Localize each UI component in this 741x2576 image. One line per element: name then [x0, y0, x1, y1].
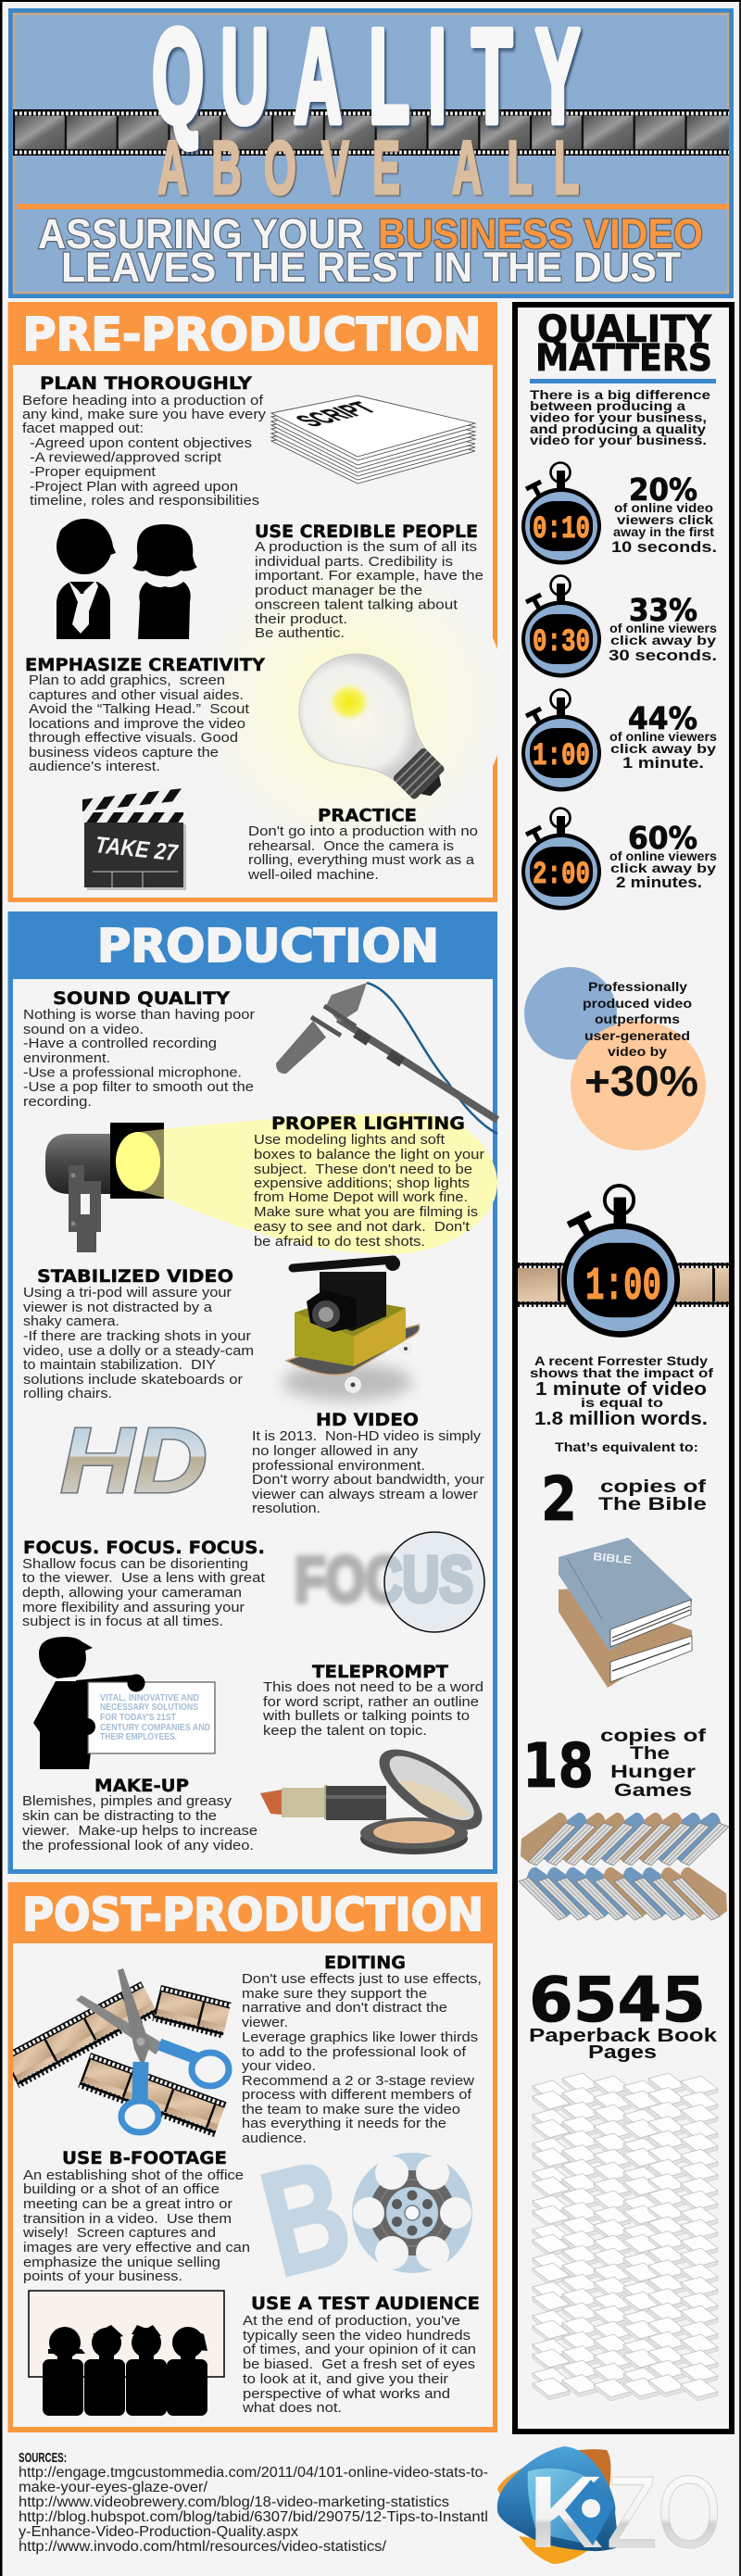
text: forrester study: [530, 1353, 713, 1454]
text: editing: has everything it needs for the: [242, 2116, 446, 2131]
text: use b-footage: [22, 2148, 250, 2284]
text: proper lighting: from Home Depot will work fine.: [254, 1189, 468, 1205]
text: hd video: resolution.: [252, 1501, 320, 1516]
stat: 18 copies of the hunger games: Hunger: [610, 1763, 697, 1782]
text: emphasize creativity: locations and improve the video: [29, 716, 245, 732]
icon: HD logo: HD: [60, 1409, 207, 1513]
icon: light bulb: [275, 630, 476, 831]
icon: pile of pages: [533, 2073, 718, 2401]
text: editing: process with different members of: [242, 2087, 472, 2103]
logo: kzo: K: [529, 2456, 603, 2570]
icon: presenter with cue card: NECESSARY SOLUTIONS: [100, 1703, 198, 1713]
heading: post-production: POST-PRODUCTION: [22, 1889, 484, 1941]
sources: [19, 2450, 488, 2555]
text: stabilized video: rolling chairs.: [23, 1386, 112, 1401]
text: sound quality: environment.: [23, 1050, 110, 1066]
text: use a test audience: typically seen the video hundreds: [243, 2328, 471, 2344]
text: editing: to add to the professional look of: [242, 2044, 467, 2060]
callout: +30% venn: video by: [608, 1044, 667, 1059]
text: stabilized video: -If there are tracking shots in your: [23, 1328, 251, 1344]
icon: stopwatch 1:00: 1:00: [533, 739, 590, 774]
text: use b-footage: meeting can be a great intro or: [23, 2196, 232, 2212]
stat: 2 copies of the bible: The Bible: [598, 1495, 707, 1514]
heading: pre-production: PRE-PRODUCTION: [22, 308, 482, 361]
text: editing: your video.: [242, 2058, 316, 2074]
text: use a test audience: to look at it, and give you their: [243, 2371, 448, 2387]
text: sound quality: SOUND QUALITY: [53, 988, 230, 1009]
callout: +30% venn: Professionally: [588, 979, 687, 994]
text: practice: well-oiled machine.: [247, 867, 379, 883]
text: emphasize creativity: [25, 655, 265, 774]
stat: 20%: [611, 471, 717, 556]
text: plan thoroughly: any kind, make sure you have every: [22, 407, 267, 422]
icon: blurred focus word with lens: FOCUS: [295, 1543, 473, 1615]
text: plan thoroughly: -Project Plan with agreed upon: [30, 479, 238, 495]
stat: 44%: [609, 700, 717, 772]
text: sound quality: Nothing is worse than having poor: [23, 1007, 255, 1023]
stat: 20%: 20%: [629, 471, 697, 508]
text: emphasize creativity: audience's interest.: [29, 759, 160, 774]
stat: 33%: 30 seconds.: [609, 647, 717, 664]
film strip band: [13, 109, 729, 156]
text: plan thoroughly: PLAN THOROUGHLY: [40, 373, 252, 394]
icon: presenter with cue card: CENTURY COMPANIES AND: [100, 1723, 210, 1733]
stat: 60%: of online viewers: [609, 848, 717, 863]
text: editing: EDITING: [324, 1953, 406, 1973]
text: hd video: HD VIDEO: [316, 1410, 419, 1430]
text: forrester study: A recent Forrester Study: [534, 1353, 708, 1368]
icon: stopwatch 0:30: 0:30: [533, 625, 590, 660]
icon: large stopwatch: [561, 1186, 680, 1338]
text: forrester study: That’s equivalent to:: [555, 1439, 698, 1454]
text: stabilized video: video, use a dolly or a steady-cam: [23, 1343, 254, 1359]
logo: kzo: [497, 2446, 722, 2570]
text: make-up: [22, 1776, 257, 1853]
text: plan thoroughly: -A reviewed/approved script: [30, 450, 222, 465]
text: proper lighting: PROPER LIGHTING: [271, 1113, 465, 1134]
text: hd video: professional environment.: [252, 1458, 425, 1474]
stat: 60%: [609, 820, 717, 891]
text: hd video: [252, 1410, 484, 1516]
text: use a test audience: what does not.: [242, 2400, 342, 2416]
icon: man silhouette: [57, 519, 116, 639]
icon: blurred focus word with lens: [295, 1532, 484, 1632]
text: practice: PRACTICE: [318, 806, 417, 826]
heading: quality matters: MATTERS: [535, 337, 712, 380]
icon: script pile: SCRIPT: [287, 398, 383, 430]
text: use credible people: individual parts. Credibility is: [255, 554, 453, 570]
text: use b-footage: An establishing shot of the office: [23, 2168, 244, 2183]
panel: pre-production: [7, 302, 507, 902]
callout: +30% venn: produced video: [583, 996, 692, 1011]
text: use credible people: important. For example, have the: [255, 568, 484, 584]
text: intro: There is a big difference: [530, 387, 710, 402]
icon: spotlight beam: [164, 1113, 497, 1254]
stat: 2 copies of the bible: [541, 1464, 707, 1535]
text: sound quality: sound on a video.: [23, 1022, 144, 1037]
icon: light glow: [195, 547, 507, 858]
heading: production: PRODUCTION: [97, 920, 439, 973]
text: emphasize creativity: through effective visuals. Good: [29, 730, 238, 746]
icon: audience silhouettes at screen: [29, 2291, 224, 2416]
stat: 18 copies of the hunger games: The: [630, 1744, 670, 1764]
text: editing: Recommend a 2 or 3-stage review: [242, 2073, 474, 2089]
text: proper lighting: Use modeling lights and soft: [254, 1132, 446, 1148]
callout: +30% venn: outperforms: [595, 1012, 680, 1026]
icon: lipstick and compact: [260, 1735, 495, 1854]
text: emphasize creativity: Plan to add graphics, screen: [29, 672, 225, 688]
text: hd video: Don't worry about bandwidth, your: [252, 1472, 484, 1488]
text: emphasize creativity: business videos capture the: [29, 745, 219, 760]
text: plan thoroughly: facet mapped out:: [22, 421, 144, 436]
film strip: sidebar: [518, 1263, 729, 1307]
panel: production: [7, 911, 497, 1874]
text: use credible people: onscreen talent talking about: [255, 597, 458, 613]
icon: presenter with cue card: [33, 1637, 215, 1769]
text: teleprompt: TELEPROMPT: [312, 1662, 448, 1682]
subtitle: BUSINESS VIDEO: [378, 210, 703, 258]
stat: 2 copies of the bible: copies of: [600, 1477, 707, 1497]
stat: 33%: [609, 592, 717, 664]
text: hd video: no longer allowed in any: [252, 1443, 419, 1459]
header banner: [8, 2, 734, 298]
text: use credible people: their product.: [255, 611, 347, 627]
icon: presenter with cue card: FOR TODAY'S 21ST: [100, 1713, 176, 1723]
text: sound quality: -Use a pop filter to smooth out the: [23, 1079, 254, 1095]
text: proper lighting: subject. These don't need to be: [254, 1162, 472, 1177]
text: hd video: It is 2013. Non-HD video is simply: [252, 1428, 482, 1444]
text: intro: and producing a quality: [530, 421, 706, 436]
text: proper lighting: expensive additions; shop lights: [254, 1175, 470, 1191]
text: use b-footage: points of your business.: [23, 2268, 182, 2284]
stat: 44%: 44%: [628, 700, 697, 736]
text: editing: viewer.: [242, 2015, 288, 2030]
text: use credible people: [255, 521, 484, 641]
stat: 18 copies of the hunger games: [522, 1727, 707, 1802]
text: use a test audience: At the end of production, you've: [243, 2313, 460, 2329]
icon: boom microphone: [276, 983, 497, 1134]
text: practice: rolling, everything must work as a: [248, 852, 475, 868]
icon: stopwatch 2:00: 2:00: [533, 858, 590, 893]
text: teleprompt: [262, 1662, 484, 1739]
stat: 2 copies of the bible: 2: [541, 1464, 577, 1535]
stat: 60%: 2 minutes.: [616, 873, 702, 891]
text: forrester study: is equal to: [581, 1395, 663, 1410]
icon: camera on skateboard: [283, 1256, 420, 1401]
text: use a test audience: be biased. Get a fresh set of eyes: [243, 2356, 475, 2372]
stat: 33%: click away by: [610, 633, 716, 647]
text: use a test audience: perspective of what works and: [243, 2386, 450, 2402]
text: emphasize creativity: Avoid the “Talking Head.” Scout: [29, 701, 250, 717]
text: use credible people: USE CREDIBLE PEOPLE: [255, 521, 478, 542]
text: use b-footage: wisely! Screen captures and: [22, 2225, 216, 2241]
text: proper lighting: easy to see and not dark. Don't: [254, 1219, 471, 1235]
text: plan thoroughly: [22, 373, 267, 509]
text: plan thoroughly: timeline, roles and responsibilities: [30, 493, 259, 509]
text: hd video: viewer can always stream a lower: [252, 1487, 478, 1502]
stat: 18 copies of the hunger games: copies of: [600, 1727, 707, 1746]
panel: post-production: [2, 1882, 497, 2432]
text: use a test audience: of times, and your opinion of it can: [243, 2342, 476, 2357]
stat: 6545 paperback book pages: [529, 1964, 718, 2063]
text: teleprompt: with bullets or talking points to: [262, 1708, 470, 1724]
text: intro: between producing a: [530, 398, 685, 413]
text: focus: to the viewer. Use a lens with great: [22, 1570, 266, 1586]
text: sound quality: [23, 988, 255, 1110]
stat: 60%: click away by: [610, 861, 716, 875]
sources: http://www.invodo.com/html/resources/video-statistics/: [19, 2539, 387, 2555]
stat: 33%: of online viewers: [609, 621, 717, 635]
icon: bibles: BIBLE: [593, 1550, 633, 1566]
text: teleprompt: for word script, rather an outline: [263, 1694, 479, 1710]
text: make-up: skin can be distracting to the: [22, 1808, 217, 1824]
text: stabilized video: [23, 1266, 254, 1401]
callout: +30% venn: user-generated: [584, 1028, 690, 1043]
heading: quality matters: QUALITY: [537, 308, 712, 351]
text: plan thoroughly: -Proper equipment: [30, 464, 157, 480]
text: make-up: Blemishes, pimples and greasy: [22, 1793, 232, 1809]
text: stabilized video: solutions include skateboards or: [23, 1372, 243, 1388]
text: emphasize creativity: captures and other visual aides.: [29, 687, 244, 703]
title: above all: ABOVE ALL: [157, 126, 579, 211]
text: stabilized video: to maintain stabilization. DIY: [23, 1357, 216, 1373]
stat: 33%: 33%: [629, 592, 697, 628]
subtitle: LEAVES THE REST IN THE DUST: [61, 244, 681, 291]
sources: y-Enhance-Video-Production-Quality.aspx: [19, 2524, 298, 2540]
callout: +30% venn: +30%: [584, 1057, 698, 1105]
icon: large stopwatch: 1:00: [585, 1261, 661, 1313]
text: stabilized video: Using a tri-pod will assure your: [23, 1285, 232, 1301]
text: intro: video for your business.: [530, 433, 707, 447]
callout: +30% venn: [524, 967, 706, 1150]
text: proper lighting: be afraid to do test shots.: [254, 1234, 425, 1250]
text: stabilized video: viewer is not distracted by a: [23, 1300, 213, 1315]
stat: 18 copies of the hunger games: Games: [614, 1781, 692, 1801]
sources: SOURCES:: [19, 2450, 67, 2466]
text: intro: video for your business,: [530, 409, 707, 424]
text: use b-footage: USE B-FOOTAGE: [62, 2148, 227, 2168]
icon: letter B and film reel: B: [247, 2128, 365, 2307]
subtitle: [38, 210, 703, 291]
text: use credible people: A production is the sum of all its: [255, 539, 477, 555]
stat: 18 copies of the hunger games: 18: [522, 1730, 594, 1802]
icon: stopwatch 2:00: [521, 808, 601, 910]
icon: clapperboard: TAKE 27: [94, 832, 180, 866]
text: teleprompt: This does not need to be a word: [263, 1679, 484, 1695]
icon: spotlight: [45, 1123, 164, 1252]
text: use b-footage: emphasize the unique selling: [23, 2255, 220, 2270]
icon: presenter with cue card: VITAL, INNOVATIVE AND: [100, 1693, 199, 1703]
icon: stopwatch 1:00: [521, 689, 601, 791]
text: make-up: the professional look of any video.: [22, 1838, 254, 1853]
icon: script pile: [271, 396, 475, 484]
text: use b-footage: transition in a video. Use them: [23, 2211, 232, 2227]
text: practice: [247, 806, 478, 883]
text: teleprompt: keep the talent on topic.: [263, 1723, 427, 1739]
heading: quality matters: [535, 308, 712, 380]
text: use b-footage: images are very effective and can: [23, 2240, 250, 2256]
text: use b-footage: building or a shot of an office: [23, 2181, 220, 2197]
icon: stacked books: [519, 1813, 729, 1920]
stat: 20%: of online video: [614, 500, 713, 515]
icon: bibles: [559, 1538, 692, 1688]
text: sound quality: recording.: [23, 1094, 92, 1110]
text: forrester study: 1.8 million words.: [534, 1409, 708, 1429]
text: editing: make sure they support the: [242, 1986, 427, 2002]
text: editing: audience.: [242, 2130, 307, 2146]
text: sound quality: -Have a controlled recording: [23, 1036, 217, 1051]
text: focus: more flexibility and assuring your: [22, 1600, 245, 1615]
text: forrester study: shows that the impact of: [530, 1365, 713, 1380]
text: focus: depth, allowing your cameraman: [22, 1585, 242, 1601]
text: focus: Shallow focus can be disorienting: [22, 1556, 248, 1572]
text: practice: rehearsal. Once the camera is: [248, 838, 454, 854]
text: proper lighting: Make sure what you are filming is: [254, 1204, 478, 1220]
icon: scissors cutting film: [2, 1968, 232, 2137]
text: editing: Don't use effects just to use effects,: [242, 1971, 482, 1987]
text: focus: [22, 1538, 266, 1629]
sources: http://blog.hubspot.com/blog/tabid/6307/bid/29075/12-Tips-to-Instantl: [19, 2509, 488, 2525]
icon: stopwatch 0:10: [521, 463, 601, 565]
text: focus: subject is in focus at all times.: [22, 1614, 223, 1629]
stat: 6545 paperback book pages: Paperback Book: [529, 2026, 718, 2046]
icon: blurred focus word with lens: FOCUS: [295, 1543, 473, 1615]
text: emphasize creativity: EMPHASIZE CREATIVITY: [25, 655, 265, 675]
stat: 20%: away in the first: [613, 524, 714, 539]
text: editing: Leverage graphics like lower thirds: [242, 2029, 478, 2045]
sources: http://www.videobrewery.com/blog/18-video-marketing-statistics: [19, 2494, 449, 2510]
text: stabilized video: shaky camera.: [23, 1313, 119, 1329]
icon: clapperboard: [82, 788, 186, 890]
stat: 20%: 10 seconds.: [611, 538, 717, 556]
text: use a test audience: [242, 2293, 480, 2416]
subtitle: ASSURING YOUR: [38, 210, 364, 258]
panel: quality matters sidebar: [515, 305, 732, 2431]
sources: make-your-eyes-glaze-over/: [19, 2480, 208, 2495]
text: plan thoroughly: Before heading into a production of: [22, 393, 264, 408]
text: practice: Don't go into a production with no: [248, 823, 478, 839]
stat: 6545 paperback book pages: Pages: [588, 2042, 657, 2063]
icon: presenter with cue card: THEIR EMPLOYEES.: [100, 1732, 177, 1742]
text: proper lighting: [254, 1113, 484, 1250]
stat: 6545 paperback book pages: 6545: [529, 1964, 706, 2036]
text: editing: [242, 1953, 482, 2146]
stat: 44%: click away by: [610, 741, 716, 756]
icon: woman silhouette: [132, 524, 197, 639]
text: stabilized video: STABILIZED VIDEO: [37, 1266, 233, 1287]
text: make-up: MAKE-UP: [94, 1776, 189, 1796]
sources: http://engage.tmgcustommedia.com/2011/04/101-online-video-stats-to-: [19, 2465, 488, 2481]
text: use a test audience: USE A TEST AUDIENCE: [251, 2293, 480, 2314]
icon: stopwatch 0:30: [521, 576, 601, 678]
stat: 60%: 60%: [628, 820, 697, 856]
stat: 44%: of online viewers: [609, 729, 717, 744]
text: editing: the team to make sure the video: [242, 2102, 460, 2117]
text: plan thoroughly: -Agreed upon content objectives: [30, 435, 252, 451]
icon: stopwatch 0:10: 0:10: [533, 512, 590, 547]
text: editing: narrative and don't distract the: [242, 2000, 447, 2016]
icon: letter B and film reel: [247, 2128, 472, 2307]
text: sound quality: -Use a professional microphone.: [23, 1065, 242, 1080]
text: intro: [530, 387, 710, 447]
text: proper lighting: boxes to balance the light on your: [254, 1147, 484, 1162]
text: use credible people: Be authentic.: [255, 625, 345, 641]
text: use credible people: product manager be the: [255, 583, 422, 598]
stat: 44%: 1 minute.: [622, 754, 704, 772]
stat: 20%: viewers click: [617, 512, 713, 527]
text: forrester study: 1 minute of video: [535, 1379, 707, 1400]
title: quality: QUALITY: [152, 2, 580, 152]
text: focus: FOCUS. FOCUS. FOCUS.: [23, 1538, 265, 1558]
text: make-up: viewer. Make-up helps to increase: [22, 1823, 257, 1839]
